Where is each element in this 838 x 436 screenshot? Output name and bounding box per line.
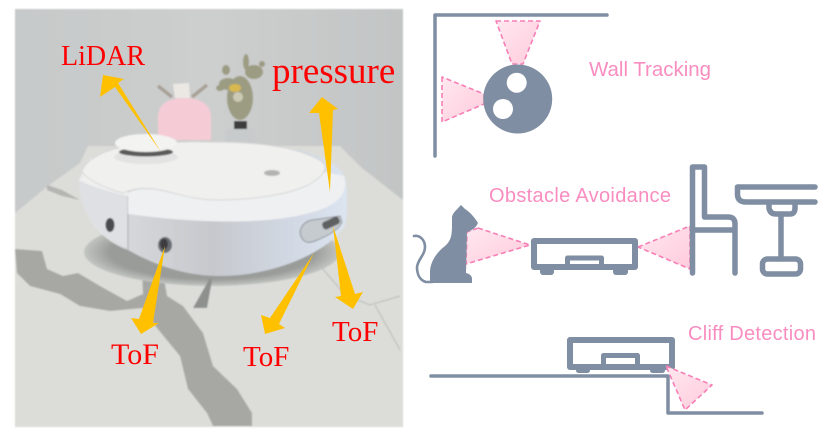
- icon: robot on ledge: [570, 340, 672, 373]
- icon: robot top view: [483, 64, 552, 134]
- arrow: LiDAR: [100, 75, 161, 152]
- arrow: ToF middle: [261, 253, 314, 334]
- sensor cone: toward cat: [466, 228, 530, 264]
- wall corner: [435, 15, 607, 156]
- arrow: pressure: [309, 97, 338, 192]
- panel: wall tracking: [435, 15, 711, 156]
- heading: Obstacle Avoidance: Obstacle Avoidance: [489, 185, 671, 207]
- arrow: ToF right: [333, 226, 363, 309]
- panel: obstacle avoidance: [414, 167, 815, 283]
- icon: cat: [414, 205, 478, 283]
- icon: chair: [692, 167, 735, 273]
- arrow: ToF left: [131, 246, 165, 334]
- panel: cliff detection: [431, 323, 816, 413]
- panel: robot photo: [15, 9, 403, 427]
- sensor cone: downward: [666, 366, 712, 410]
- sensor cone: toward chair: [638, 226, 690, 269]
- sensor cone: top: [496, 21, 540, 64]
- label: LiDAR: LiDAR: [61, 41, 145, 72]
- label: ToF middle: ToF: [243, 341, 289, 373]
- label: pressure: pressure: [272, 51, 395, 92]
- heading: Wall Tracking: Wall Tracking: [589, 59, 711, 81]
- heading: Cliff Detection: Cliff Detection: [688, 323, 816, 345]
- sensor cone: left: [442, 77, 484, 122]
- label: ToF left: ToF: [111, 338, 159, 371]
- icon: robot side view: [534, 241, 635, 275]
- icon: table: [738, 187, 815, 274]
- ledge and floor: [431, 376, 762, 413]
- label: ToF right: ToF: [332, 316, 378, 348]
